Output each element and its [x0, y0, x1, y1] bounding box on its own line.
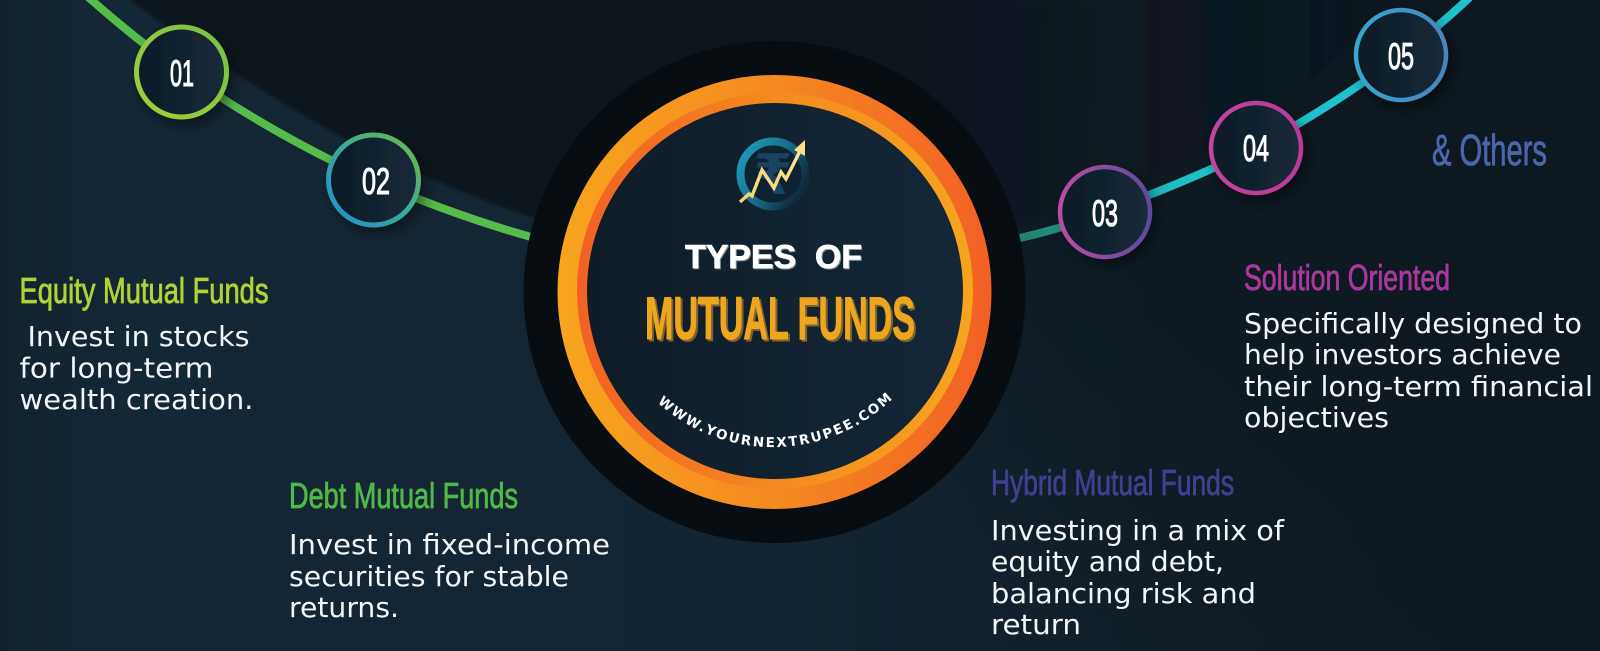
text block: debt [289, 475, 610, 624]
left connector arc [88, 0, 531, 237]
website url: WWW.YOURNEXTRUPEE.COM [659, 392, 892, 448]
text block: solution oriented: Specifically designed to [1244, 308, 1582, 340]
text block: hybrid: balancing risk and [991, 578, 1256, 610]
node 01 [136, 27, 226, 117]
text block: equity: Invest in stocks [28, 321, 250, 353]
node 01: 01 [170, 53, 194, 94]
text block: hybrid: return [991, 609, 1081, 641]
title line 1: TYPES OF [685, 238, 862, 275]
text block: equity: Equity Mutual Funds [20, 270, 268, 311]
text block: solution oriented: Solution Oriented [1244, 257, 1450, 298]
text block: hybrid: equity and debt, [991, 546, 1224, 578]
text block: debt: Debt Mutual Funds [289, 475, 518, 516]
text block: hybrid: Investing in a mix of [991, 515, 1285, 547]
node 04: 04 [1243, 128, 1269, 169]
text block: equity: wealth creation. [20, 384, 254, 416]
logo icon: ₹ [754, 143, 792, 208]
text block: debt: returns. [289, 592, 399, 624]
text block: debt: Invest in fixed-income [289, 529, 610, 561]
title line 2: MUTUAL FUNDS [645, 285, 915, 352]
node 02 [328, 135, 418, 225]
text block: solution oriented: objectives [1244, 402, 1389, 434]
text block: solution oriented [1244, 257, 1593, 434]
logo icon [740, 140, 806, 208]
text block: hybrid [991, 462, 1285, 641]
text block: debt: securities for stable [289, 561, 569, 593]
node 02: 02 [362, 161, 390, 202]
text block: solution oriented: their long-term financial [1244, 371, 1593, 403]
central badge [524, 41, 1026, 543]
node 05: 05 [1388, 36, 1414, 77]
right connector arc [1020, 0, 1470, 238]
text block: solution oriented: help investors achieve [1244, 339, 1561, 371]
node 04 [1211, 103, 1301, 193]
node 05 [1356, 10, 1446, 100]
text block: equity [20, 270, 268, 416]
node 03: 03 [1092, 193, 1118, 234]
text block: hybrid: Hybrid Mutual Funds [991, 462, 1234, 503]
node 03 [1060, 167, 1150, 257]
text block: equity: for long-term [20, 352, 214, 384]
